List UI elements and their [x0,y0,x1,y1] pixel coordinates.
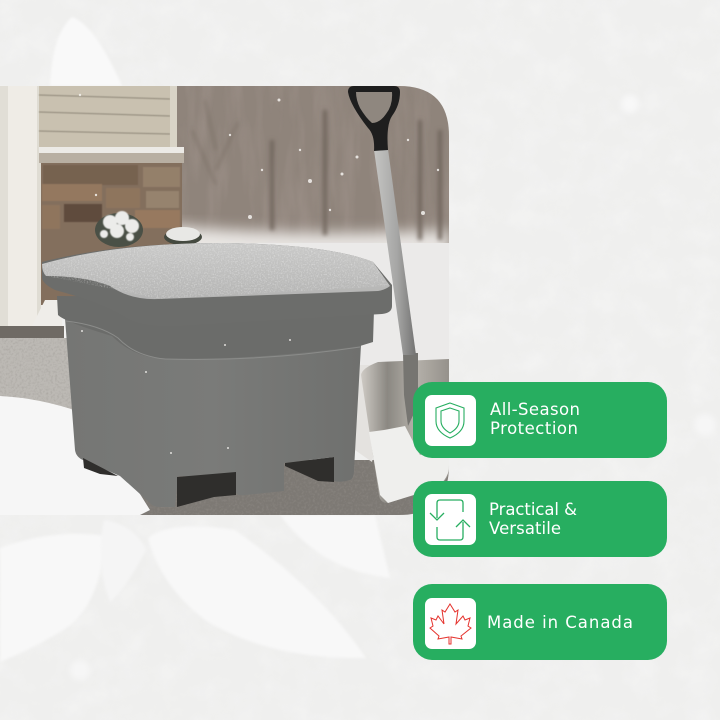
bin pallet feet cutouts [83,457,334,507]
falling snowflakes [79,94,439,454]
snow shovel [348,86,449,503]
feature card: Made in Canada [413,584,667,660]
snow-topped bin lid [42,243,392,314]
bin upper rim band [57,296,374,359]
blurred winter tree backdrop [177,86,449,243]
ground, pavement and snow [0,245,449,515]
card label [490,400,580,438]
icon tile: cycle arrows [425,494,476,545]
grey bin body [57,296,374,507]
card label: Protection [490,419,578,438]
icon tile: red maple leaf [425,598,476,649]
beige house siding [39,86,177,152]
icon tile: shield [425,395,476,446]
snowy yard [246,243,449,256]
feature card: All-Season Protection [413,382,667,458]
white house corner trim [0,86,42,326]
card label: All-Season [490,400,580,419]
card label: Made in Canada [487,613,633,632]
card label: Versatile [489,519,561,538]
card label: Practical & [489,500,577,519]
photo: snow bin and shovel [0,86,450,515]
stone wall and ledge [39,147,184,305]
snow-dusted shrubs [95,211,202,247]
card label [489,500,577,538]
feature card: Practical & Versatile [413,481,667,557]
